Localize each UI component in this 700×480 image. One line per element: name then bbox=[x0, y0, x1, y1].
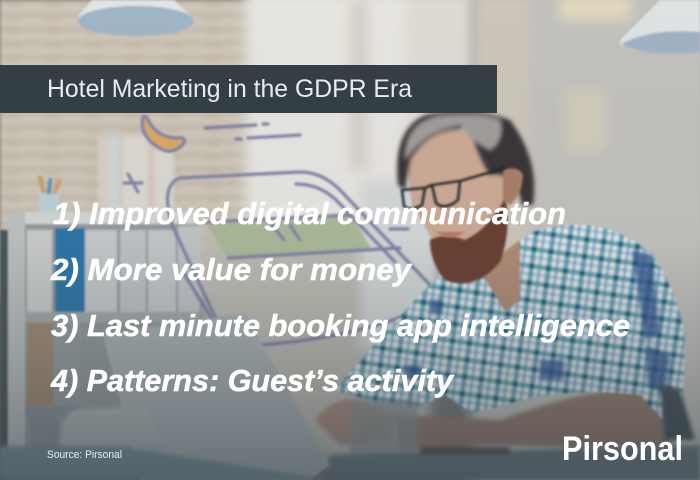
wall behind laptop bbox=[200, 230, 430, 460]
point 1: 1) Improved digital communication bbox=[53, 196, 566, 231]
hand and glass bbox=[315, 399, 418, 470]
speed lines bbox=[205, 124, 300, 139]
glasses bbox=[402, 168, 505, 209]
shirt bbox=[335, 225, 685, 440]
face bbox=[405, 130, 510, 270]
binders on top shelf bbox=[98, 136, 174, 216]
plus marks bbox=[124, 174, 142, 192]
laptop bbox=[103, 313, 330, 480]
sleeve shadow dark patches bbox=[405, 250, 670, 395]
wall: bright window centre bbox=[245, 0, 475, 230]
arm bbox=[395, 389, 670, 450]
lamp right bbox=[620, 0, 700, 54]
ear bbox=[503, 168, 523, 205]
point 3: 3) Last minute booking app intelligence bbox=[51, 308, 630, 343]
logo: Pirsonal: Pirsonal bbox=[562, 430, 683, 468]
wall: brick left bbox=[0, 0, 260, 300]
background cabinet bbox=[360, 180, 440, 350]
list of four points bbox=[50, 196, 630, 398]
elbow cuff bbox=[660, 385, 695, 440]
man at laptop bbox=[335, 111, 695, 450]
desk bbox=[0, 406, 700, 480]
point 4: 4) Patterns: Guest’s activity bbox=[50, 363, 455, 398]
lamp left bbox=[78, 0, 195, 36]
neck bbox=[480, 240, 520, 312]
title: Hotel Marketing in the GDPR Era bbox=[47, 75, 412, 103]
smile bbox=[436, 232, 465, 238]
phone outline bbox=[168, 172, 434, 346]
wall: right side bbox=[470, 0, 700, 480]
point 2: 2) More value for money bbox=[50, 252, 413, 287]
title bar bbox=[0, 65, 497, 113]
source note: Source: Pirsonal bbox=[47, 449, 122, 461]
hair bbox=[397, 111, 534, 205]
pencil cup bbox=[37, 176, 62, 214]
moon icon bbox=[142, 116, 184, 151]
beard bbox=[430, 198, 508, 283]
illustration: phone line art bbox=[124, 116, 434, 372]
shelf unit bbox=[0, 212, 200, 452]
phone screen bbox=[206, 214, 372, 258]
